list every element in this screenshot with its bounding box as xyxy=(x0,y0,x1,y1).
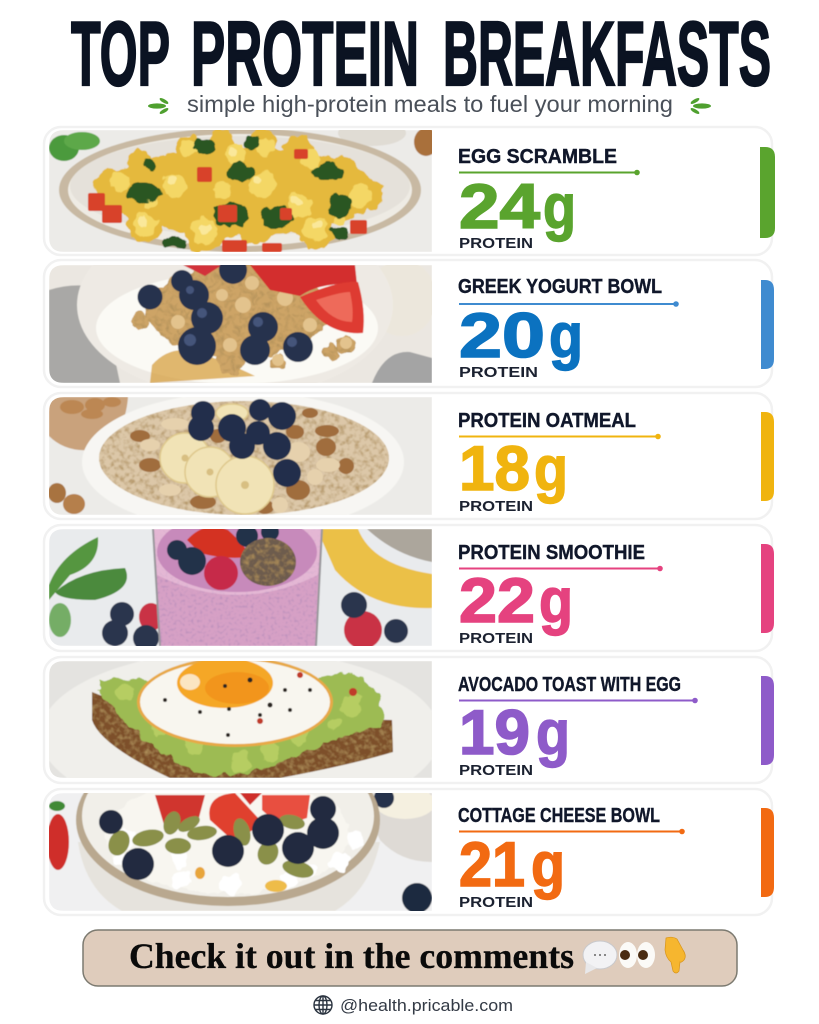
protein amount: g xyxy=(549,301,583,371)
protein amount xyxy=(459,830,565,900)
protein label: PROTEIN xyxy=(459,364,538,381)
panel: avocado toast with egg xyxy=(43,656,774,784)
panel: protein oatmeal xyxy=(44,392,774,532)
panel: cottage cheese bowl xyxy=(43,788,774,916)
subtitle text: simple high-protein meals to fuel your morning xyxy=(187,91,673,117)
protein amount: 20 xyxy=(459,301,545,371)
protein amount xyxy=(459,698,570,768)
handle text: @health.pricable.com xyxy=(340,996,513,1015)
protein amount: g xyxy=(539,566,573,636)
icon: globe xyxy=(314,996,332,1014)
name: COTTAGE CHEESE BOWL xyxy=(458,804,660,827)
photo: avocado toast xyxy=(49,661,432,778)
icon: pointing down hand xyxy=(665,937,685,973)
protein amount: g xyxy=(534,434,568,504)
title: PROTEIN xyxy=(191,4,419,105)
protein amount: 21 xyxy=(459,830,525,900)
protein amount xyxy=(459,172,576,242)
icon: right leaf sprig xyxy=(690,97,711,115)
icon: left leaf sprig xyxy=(148,97,169,115)
protein amount xyxy=(459,434,568,504)
rule xyxy=(459,698,698,703)
protein label: PROTEIN xyxy=(459,762,533,779)
photo: cottage cheese bowl xyxy=(49,793,432,911)
protein amount: g xyxy=(536,698,570,768)
title xyxy=(71,4,771,105)
card xyxy=(44,260,772,387)
name: PROTEIN OATMEAL xyxy=(458,409,636,432)
icon: speech bubble xyxy=(583,941,617,974)
subtitle xyxy=(148,91,711,117)
card xyxy=(44,657,772,783)
protein amount: g xyxy=(531,830,565,900)
protein amount: 18 xyxy=(459,434,530,504)
rule xyxy=(459,301,679,307)
icon: eyes xyxy=(619,942,655,968)
card xyxy=(44,127,772,255)
protein label: PROTEIN xyxy=(459,498,533,515)
protein amount: g xyxy=(543,172,576,242)
accent bar xyxy=(761,808,774,897)
rule xyxy=(459,434,661,439)
panel: greek yogurt bowl xyxy=(43,259,774,388)
accent bar xyxy=(761,412,774,501)
panel: egg scramble xyxy=(44,120,775,255)
callout box xyxy=(83,930,737,986)
card xyxy=(44,393,772,519)
panel: protein smoothie xyxy=(44,512,774,651)
rule xyxy=(459,829,685,834)
protein label: PROTEIN xyxy=(459,235,533,252)
callout: check it out in the comments xyxy=(83,930,737,986)
card xyxy=(44,789,772,915)
photo: greek yogurt bowl xyxy=(49,265,432,383)
rule xyxy=(459,170,640,175)
accent bar xyxy=(761,676,774,765)
name: EGG SCRAMBLE xyxy=(458,145,617,168)
protein amount xyxy=(459,566,573,636)
callout text: Check it out in the comments xyxy=(129,936,574,976)
protein amount: 22 xyxy=(459,566,535,636)
photo: protein smoothie xyxy=(49,529,432,646)
footer: handle xyxy=(314,996,513,1015)
photo: egg scramble xyxy=(49,120,438,252)
name: PROTEIN SMOOTHIE xyxy=(458,541,645,564)
accent bar xyxy=(761,280,774,369)
accent bar xyxy=(761,544,774,633)
photo: protein oatmeal xyxy=(49,397,432,515)
protein label: PROTEIN xyxy=(459,894,533,911)
protein amount: 19 xyxy=(459,698,530,768)
name: AVOCADO TOAST WITH EGG xyxy=(458,673,681,696)
title: TOP xyxy=(71,4,170,105)
protein amount: 24 xyxy=(459,172,540,242)
card xyxy=(44,525,772,651)
name: GREEK YOGURT BOWL xyxy=(458,275,662,298)
protein label: PROTEIN xyxy=(459,630,533,647)
rule xyxy=(459,566,663,571)
accent bar xyxy=(760,147,775,238)
protein amount xyxy=(459,301,583,371)
